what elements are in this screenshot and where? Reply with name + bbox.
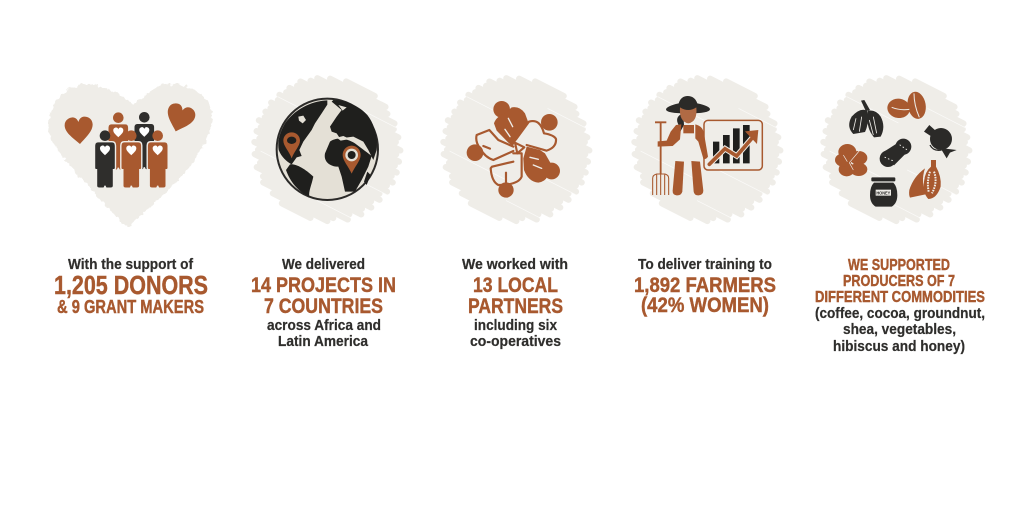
icon: honey jar: HONEY xyxy=(876,190,891,195)
icon: groundnut xyxy=(880,139,911,167)
text: commodities: DIFFERENT COMMODITIES xyxy=(815,289,985,306)
text: donors: 1,205 DONORS xyxy=(54,270,208,300)
panel: donors xyxy=(48,84,212,317)
text: farmers: 1,892 FARMERS xyxy=(634,273,776,297)
text: projects: Latin America xyxy=(278,334,369,350)
panel: farmers xyxy=(610,54,804,317)
text: projects: across Africa and xyxy=(267,318,381,334)
globe scribble background xyxy=(230,54,424,244)
text: projects: 7 COUNTRIES xyxy=(264,294,383,318)
icon: vegetable xyxy=(924,125,957,158)
panel: projects xyxy=(230,54,424,350)
text: partners: PARTNERS xyxy=(468,294,563,318)
text: donors: With the support of xyxy=(68,257,193,273)
text: projects: We delivered xyxy=(282,257,365,273)
text: projects xyxy=(251,257,396,350)
panel: partners xyxy=(419,54,613,350)
icon: hibiscus xyxy=(835,144,867,176)
icon: globe with pins xyxy=(277,99,378,200)
commodities scribble background xyxy=(799,54,993,244)
text: partners: including six xyxy=(474,318,557,334)
text: commodities: shea, vegetables, xyxy=(843,322,956,338)
icon: right heart xyxy=(162,101,197,136)
text: projects: 14 PROJECTS IN xyxy=(251,273,396,297)
icon: group of donors xyxy=(94,112,168,188)
text: donors xyxy=(54,257,208,317)
text: partners: We worked with xyxy=(462,257,568,273)
icon: farmer with chart xyxy=(653,96,762,195)
icon: commodities group xyxy=(835,90,957,207)
text: farmers: (42% WOMEN) xyxy=(641,293,769,317)
text: commodities: WE SUPPORTED xyxy=(848,257,950,274)
farmers scribble background xyxy=(610,54,804,244)
icon: cocoa xyxy=(909,160,941,199)
text: farmers: To deliver training to xyxy=(638,257,772,273)
text: commodities: PRODUCERS OF 7 xyxy=(843,273,955,290)
text: partners: co-operatives xyxy=(470,334,561,350)
icon: coffee beans xyxy=(886,90,928,120)
icon: left heart xyxy=(64,116,94,145)
text: farmers xyxy=(634,257,776,317)
heart scribble background xyxy=(48,84,212,228)
text: donors: & 9 GRANT MAKERS xyxy=(57,296,204,317)
partners scribble background xyxy=(419,54,613,244)
icon: five partners in a circle xyxy=(467,101,560,198)
text: commodities xyxy=(815,257,985,355)
icon: shea xyxy=(849,100,883,137)
text: partners xyxy=(462,257,568,350)
panel: commodities xyxy=(799,54,993,355)
text: commodities: (coffee, cocoa, groundnut, xyxy=(815,306,985,322)
text: partners: 13 LOCAL xyxy=(473,273,558,297)
text: commodities: hibiscus and honey) xyxy=(833,339,965,355)
